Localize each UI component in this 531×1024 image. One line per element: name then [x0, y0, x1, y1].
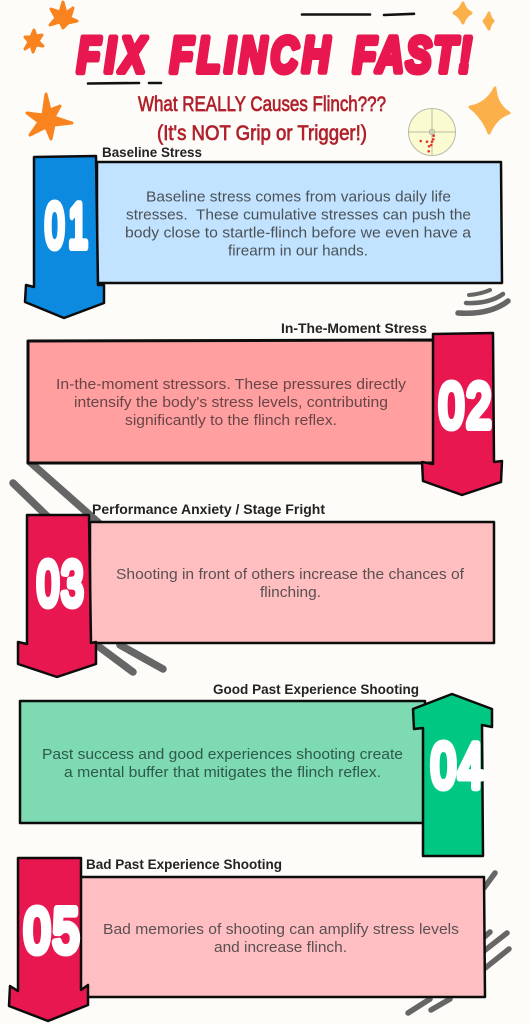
number 02: 02: [439, 372, 491, 441]
panel box: [97, 162, 502, 283]
panel box: [90, 522, 494, 643]
heading: Performance Anxiety / Stage Fright: [92, 502, 326, 517]
arrow: 05: [9, 858, 88, 1021]
title accent lines: [88, 14, 414, 83]
arrow: 04: [413, 694, 492, 856]
panel: 03 performance anxiety: [18, 502, 494, 677]
decoration: gray diagonal strokes lower right: [408, 873, 509, 1013]
heading: In-The-Moment Stress: [281, 321, 427, 336]
arrow: 01: [25, 156, 104, 318]
body text: a mental buffer that mitigates the flinch reflex.: [64, 765, 381, 781]
subtitle: What REALLY Causes Flinch???: [138, 93, 386, 116]
panel: 04 good past experience: [20, 682, 492, 856]
number 01: 01: [45, 191, 88, 261]
title: FLINCH: [170, 28, 330, 83]
body text: flinching.: [260, 585, 321, 601]
panel box: [20, 701, 425, 823]
heading: Bad Past Experience Shooting: [86, 857, 282, 872]
title: FAST!: [353, 28, 472, 83]
body text: [116, 567, 465, 601]
body text: intensify the body's stress levels, contributing: [74, 395, 388, 411]
title: FIX: [77, 28, 147, 83]
body text: [103, 922, 459, 956]
subtitle: (It's NOT Grip or Trigger!): [157, 122, 367, 145]
panel: 02 in-the-moment stress: [28, 321, 502, 495]
decoration: gray diagonal strokes middle: [13, 462, 163, 672]
body text: Past success and good experiences shooting create: [42, 747, 403, 763]
body text: Bad memories of shooting can amplify stress levels: [103, 922, 459, 938]
heading: Good Past Experience Shooting: [213, 682, 419, 697]
body text: significantly to the flinch reflex.: [125, 413, 337, 429]
icon: yellow sparkles: [454, 3, 509, 133]
body text: In-the-moment stressors. These pressures directly: [56, 377, 407, 393]
body text: [125, 190, 472, 260]
body text: firearm in our hands.: [228, 244, 368, 260]
heading: Baseline Stress: [102, 145, 202, 160]
panel box: [80, 877, 485, 997]
number 04: 04: [431, 732, 483, 801]
body text: stresses. These cumulative stresses can push the: [126, 208, 471, 224]
body text: body close to startle-flinch before we even have a: [125, 226, 472, 242]
panel: 01 baseline stress: [25, 145, 502, 318]
icon: shooting target: [408, 108, 456, 156]
subtitle: [138, 93, 386, 145]
arrow: 03: [18, 515, 96, 677]
title: [77, 28, 472, 83]
body text: Baseline stress comes from various daily life: [146, 190, 451, 206]
body text: [42, 747, 403, 781]
number 05: 05: [24, 896, 79, 966]
body text: and increase flinch.: [214, 940, 347, 956]
number 03: 03: [37, 550, 83, 619]
arrow: 02: [422, 333, 502, 495]
panel box: [28, 340, 436, 463]
decoration: gray swooshes upper right: [458, 290, 508, 313]
body text: Shooting in front of others increase the chances of: [116, 567, 465, 583]
body text: [56, 377, 407, 429]
panel: 05 bad past experience: [9, 857, 485, 1021]
icon: orange stars: [25, 2, 77, 139]
